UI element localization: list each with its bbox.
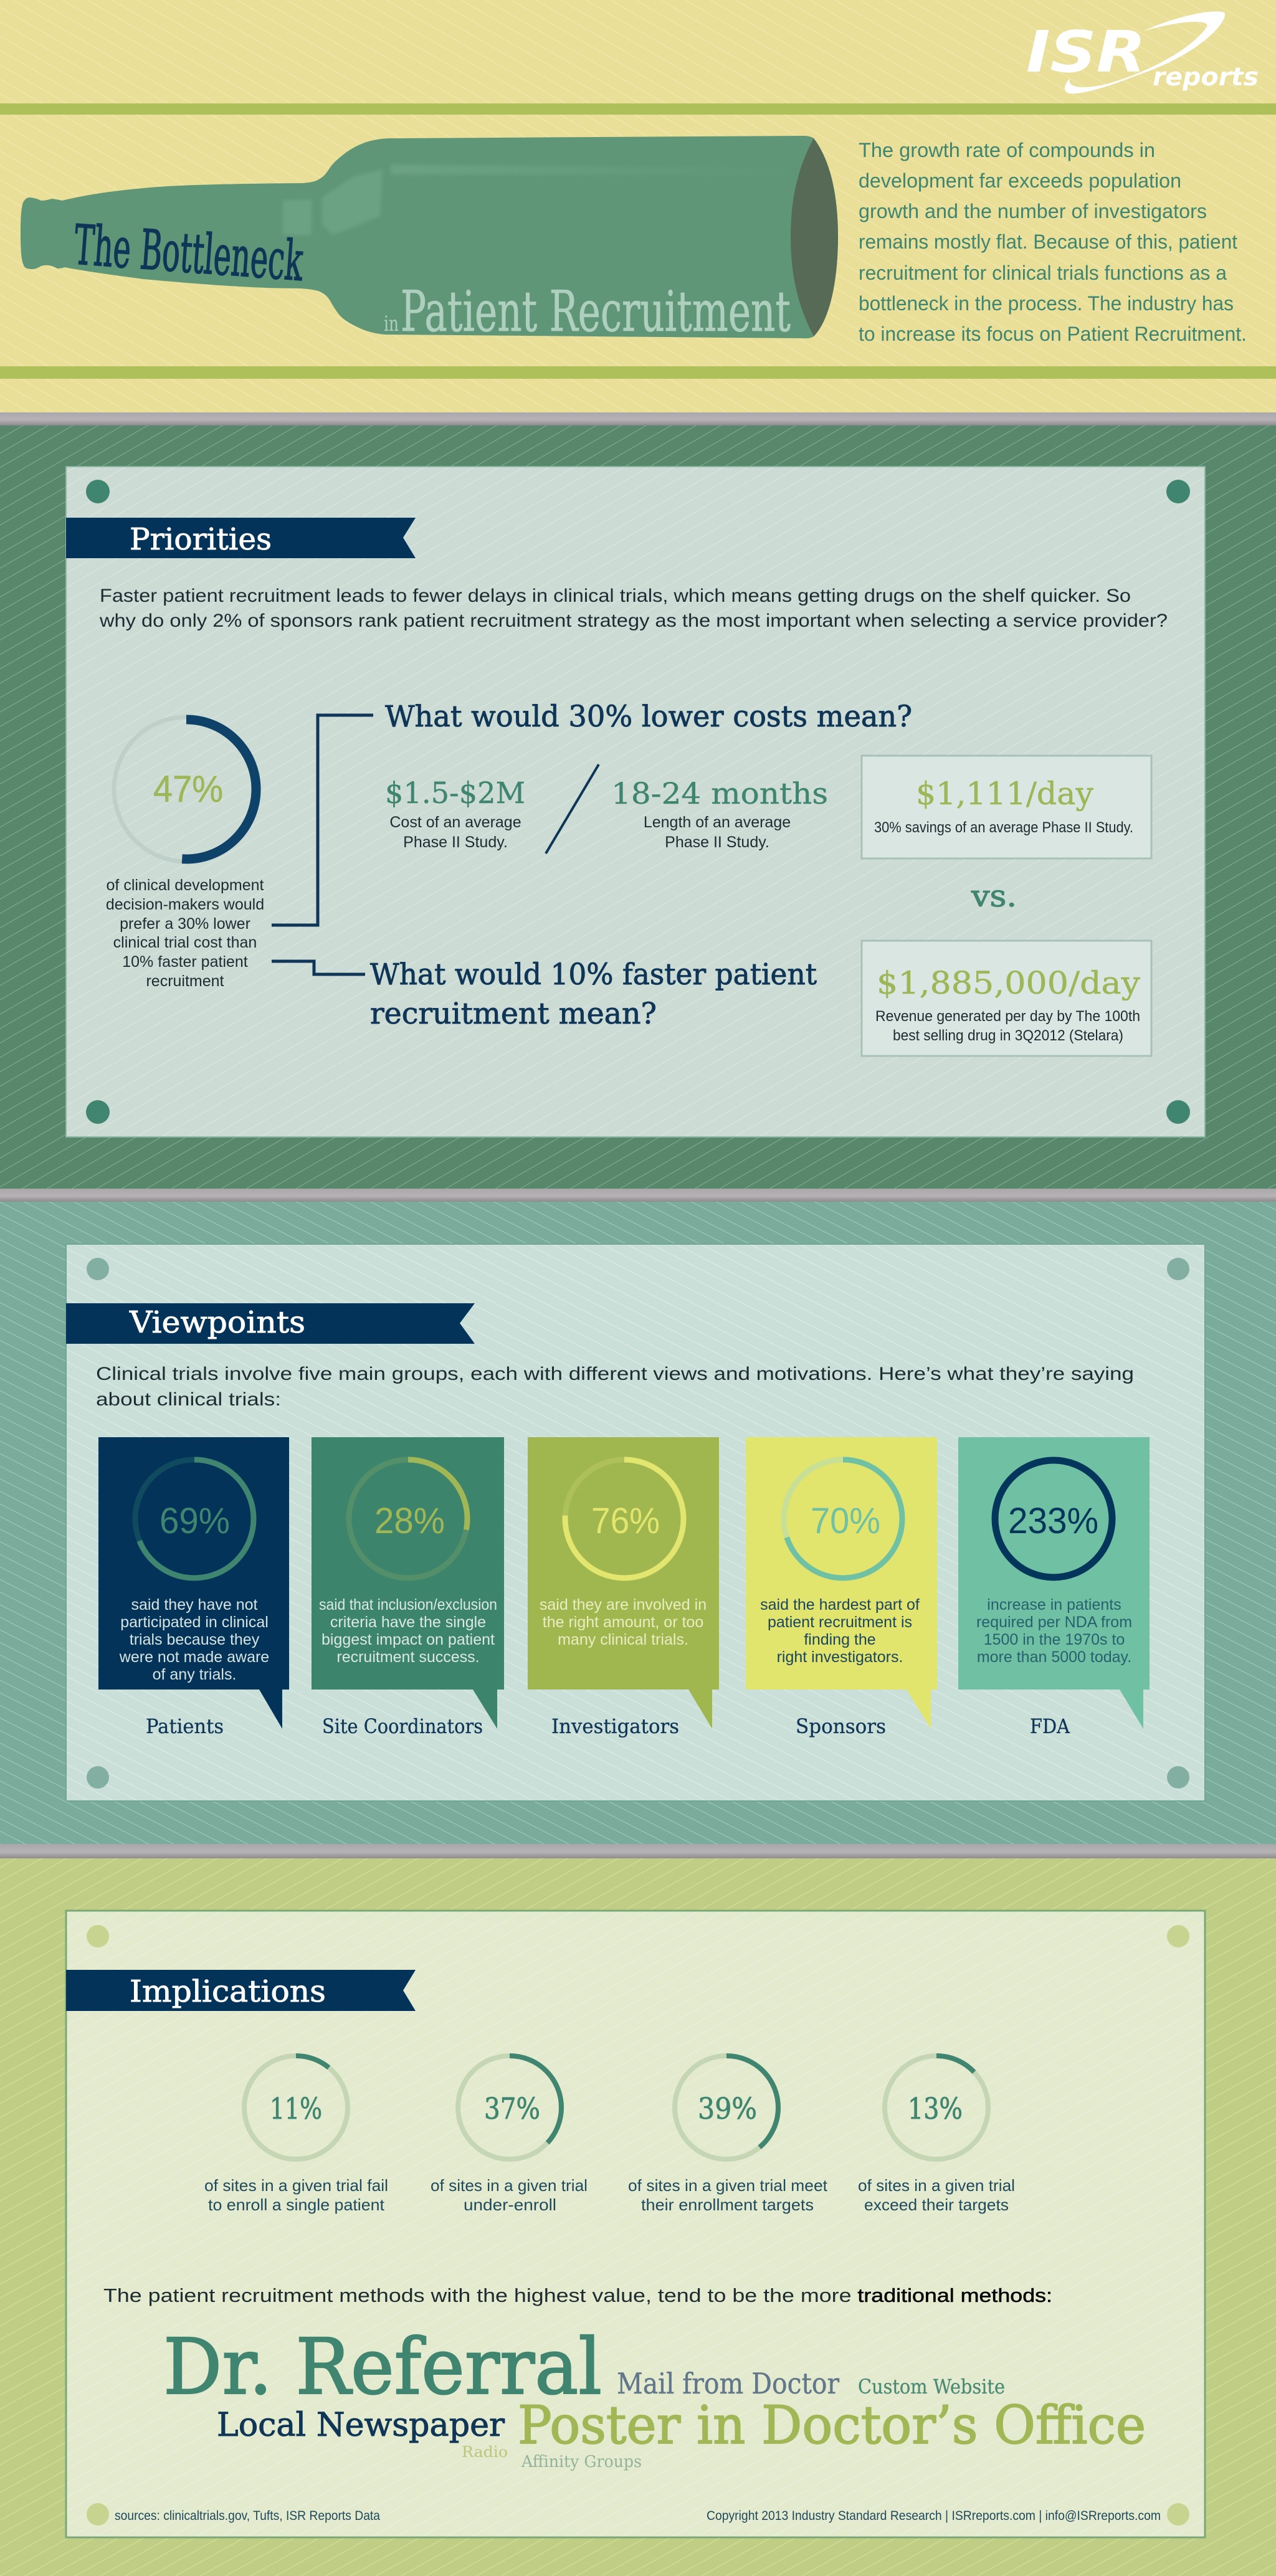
donut caption	[106, 877, 264, 990]
donut caption: 10% faster patient	[122, 953, 248, 971]
card text	[540, 1596, 707, 1648]
intro text: Clinical trials involve five main groups, each with different views and motivations. Here’s what they’re saying	[96, 1364, 1134, 1384]
word cloud: recruitment methods: Mail from Doctor	[617, 2367, 839, 2400]
intro paragraph: remains mostly flat. Because of this, patient	[859, 231, 1237, 253]
ribbon heading: Viewpoints: Viewpoints	[129, 1305, 305, 1340]
callout: 1,885,000 per day: Revenue generated per day by The 100th	[875, 1008, 1140, 1025]
intro paragraph: The growth rate of compounds in	[859, 139, 1155, 161]
title: Patient Recruitment: Patient Recruitment	[401, 279, 791, 345]
word cloud: recruitment methods: Affinity Groups	[521, 2453, 642, 2471]
word cloud: recruitment methods	[163, 2322, 1146, 2471]
ring: 233%: 233%	[1008, 1501, 1098, 1541]
heading: lower costs: What would 30% lower costs mean?	[385, 700, 912, 734]
card text: the right amount, or too	[543, 1614, 703, 1631]
stat: 39%: 39%	[698, 2092, 757, 2126]
connector to lower costs	[272, 715, 373, 925]
heading: faster recruitment: What would 10% faster patient	[370, 958, 817, 992]
intro paragraph: recruitment for clinical trials functions as a	[859, 262, 1227, 284]
callout: 1,111 per day: $1,111/day	[916, 776, 1094, 812]
intro paragraph	[859, 139, 1247, 345]
stat: 39%: of sites in a given trial meet	[628, 2176, 828, 2195]
header top band	[0, 103, 1276, 115]
card text: increase in patients	[987, 1596, 1121, 1614]
word cloud: recruitment methods: Custom Website	[858, 2375, 1005, 2398]
donut chart: 47%	[114, 717, 259, 862]
card: sponsors	[746, 1437, 937, 1738]
stat: length: Length of an average	[644, 814, 791, 831]
ring: 233%	[995, 1460, 1112, 1577]
donut caption: clinical trial cost than	[113, 934, 257, 951]
ring: 70%	[784, 1460, 902, 1578]
stat: length: Phase II Study.	[665, 834, 769, 851]
stat: 39%: their enrollment targets	[641, 2195, 814, 2214]
connector to faster recruitment	[272, 961, 365, 974]
intro text: about clinical trials:	[96, 1389, 281, 1410]
stat: 39%	[628, 2056, 828, 2214]
intro paragraph: development far exceeds population	[859, 169, 1181, 192]
callout: 1,885,000 per day: $1,885,000/day	[877, 965, 1141, 1001]
logo: ISR reports	[1026, 11, 1259, 93]
stat: 11%: of sites in a given trial fail	[204, 2176, 388, 2195]
card text: required per NDA from	[976, 1614, 1132, 1631]
callout: 1,111 per day	[862, 756, 1151, 858]
card text: said they have not	[131, 1596, 258, 1614]
card text	[976, 1596, 1132, 1666]
card text: patient recruitment is	[768, 1614, 912, 1631]
word cloud: recruitment methods: Poster in Doctor’s Office	[518, 2395, 1146, 2456]
label: Site Coordinators	[322, 1714, 483, 1738]
label: FDA	[1030, 1714, 1070, 1738]
card text: right investigators.	[777, 1648, 903, 1666]
card text: recruitment success.	[336, 1648, 480, 1666]
ribbon heading: Implications: Implications	[130, 1974, 326, 2009]
stat: 37%: of sites in a given trial	[431, 2176, 588, 2195]
card text: biggest impact on patient	[321, 1631, 495, 1648]
card text: participated in clinical	[120, 1614, 269, 1631]
card text: 1500 in the 1970s to	[984, 1631, 1125, 1648]
card text: trials because they	[130, 1631, 260, 1648]
copyright: Copyright 2013 Industry Standard Research | ISRreports.com | info@ISRreports.com	[707, 2509, 1161, 2523]
intro text	[96, 1364, 1134, 1410]
donut caption: recruitment	[146, 972, 224, 990]
divider bar	[0, 1844, 1276, 1858]
header background	[0, 0, 1276, 412]
corner dots	[86, 480, 1190, 1124]
donut caption: decision-makers would	[106, 896, 264, 913]
stat: 37%: 37%	[484, 2092, 540, 2126]
ribbon heading: Priorities	[66, 518, 416, 558]
panel: viewpoints	[66, 1244, 1205, 1801]
ring: 70%: 70%	[811, 1501, 880, 1541]
ring: 69%	[135, 1460, 254, 1578]
stat: 11%: to enroll a single patient	[208, 2195, 385, 2214]
donut caption: prefer a 30% lower	[120, 915, 250, 933]
card text: more than 5000 today.	[977, 1648, 1131, 1666]
ribbon heading: Implications	[66, 1970, 416, 2011]
word cloud: recruitment methods: Dr. Referral	[163, 2322, 602, 2412]
stat: 37%: under-enroll	[464, 2195, 556, 2214]
title: The Bottleneck: The Bottleneck	[72, 212, 305, 293]
card text	[119, 1596, 269, 1683]
card text: finding the	[804, 1631, 876, 1648]
word cloud: recruitment methods: Radio	[462, 2443, 508, 2461]
stat: 13%: of sites in a given trial	[858, 2176, 1015, 2195]
ring: 28%	[349, 1460, 467, 1578]
callout: 1,885,000 per day	[862, 941, 1151, 1056]
divider bar	[0, 412, 1276, 425]
sources: sources: clinicaltrials.gov, Tufts, ISR Reports Data	[115, 2509, 380, 2523]
logo: ISR reports: ISR	[1026, 19, 1146, 85]
section background: viewpoints	[0, 1202, 1276, 1844]
divider bar	[0, 1189, 1276, 1202]
stat: 13%: 13%	[908, 2092, 963, 2126]
illustration: green bottle	[21, 136, 838, 338]
stat: 11%	[204, 2056, 388, 2214]
section background: priorities	[0, 425, 1276, 1189]
ribbon heading: Viewpoints	[66, 1303, 475, 1344]
label: Investigators	[551, 1714, 679, 1738]
card text: said the hardest part of	[760, 1596, 920, 1614]
stat: length	[611, 777, 828, 851]
slash divider	[546, 764, 599, 853]
ring: 69%: 69%	[160, 1501, 230, 1541]
ring: 76%: 76%	[591, 1501, 660, 1541]
stat: 37%	[431, 2056, 588, 2214]
card text	[319, 1596, 497, 1666]
intro paragraph: growth and the number of investigators	[859, 200, 1207, 222]
intro text: why do only 2% of sponsors rank patient recruitment strategy as the most important when selecting a service provider?	[99, 611, 1168, 631]
card text	[760, 1596, 920, 1666]
intro text: Faster patient recruitment leads to fewer delays in clinical trials, which means getting drugs on the shelf quicker. So	[100, 586, 1131, 606]
card text: many clinical trials.	[558, 1631, 688, 1648]
stat: cost: Phase II Study.	[403, 834, 508, 851]
card: investigators	[528, 1437, 719, 1738]
donut chart: 47%: 47%	[153, 768, 223, 810]
stat: 13%	[858, 2056, 1015, 2214]
vs label: vs.	[971, 879, 1017, 914]
stat: cost	[385, 776, 525, 851]
word cloud: recruitment methods: Local Newspaper	[217, 2407, 505, 2444]
card text: were not made aware	[119, 1648, 269, 1666]
card text: said that inclusion/exclusion	[319, 1596, 497, 1614]
card text: criteria have the single	[330, 1614, 486, 1631]
stat: cost: Cost of an average	[389, 814, 521, 831]
callout: 1,111 per day: 30% savings of an average Phase II Study.	[874, 819, 1133, 836]
corner dots	[87, 1925, 1189, 2526]
intro text	[99, 586, 1168, 631]
heading: faster recruitment: recruitment mean?	[370, 997, 657, 1031]
logo: ISR reports: reports	[1153, 63, 1259, 92]
header bottom band	[0, 366, 1276, 379]
ring: 28%: 28%	[374, 1501, 445, 1541]
label: Sponsors	[796, 1714, 886, 1738]
stat: cost: $1.5-$2M	[385, 776, 525, 810]
donut caption: of clinical development	[107, 877, 264, 894]
card: patients	[98, 1437, 289, 1738]
card: site coordinators	[312, 1437, 504, 1738]
title: in: in	[384, 311, 399, 336]
callout: 1,885,000 per day: best selling drug in 3Q2012 (Stelara)	[893, 1027, 1123, 1044]
ring: 76%	[565, 1460, 683, 1578]
intro paragraph: bottleneck in the process. The industry has	[859, 292, 1234, 315]
card text: said they are involved in	[540, 1596, 707, 1614]
label: Patients	[146, 1714, 224, 1738]
stat: 13%: exceed their targets	[864, 2195, 1009, 2214]
corner dots	[87, 1258, 1189, 1789]
stat: length: 18-24 months	[611, 777, 828, 811]
stat: 11%: 11%	[270, 2092, 322, 2126]
ribbon heading: Priorities: Priorities	[130, 522, 272, 557]
card text: of any trials.	[153, 1666, 236, 1683]
intro paragraph: to increase its focus on Patient Recruitment.	[859, 323, 1247, 345]
panel: priorities	[66, 467, 1205, 1137]
heading: faster recruitment	[370, 958, 817, 1031]
methods sentence: The patient recruitment methods with the highest value, tend to be the more traditional methods:	[103, 2284, 1052, 2306]
card: FDA	[958, 1437, 1150, 1738]
panel: implications	[66, 1911, 1205, 2537]
section background: implications	[0, 1858, 1276, 2576]
